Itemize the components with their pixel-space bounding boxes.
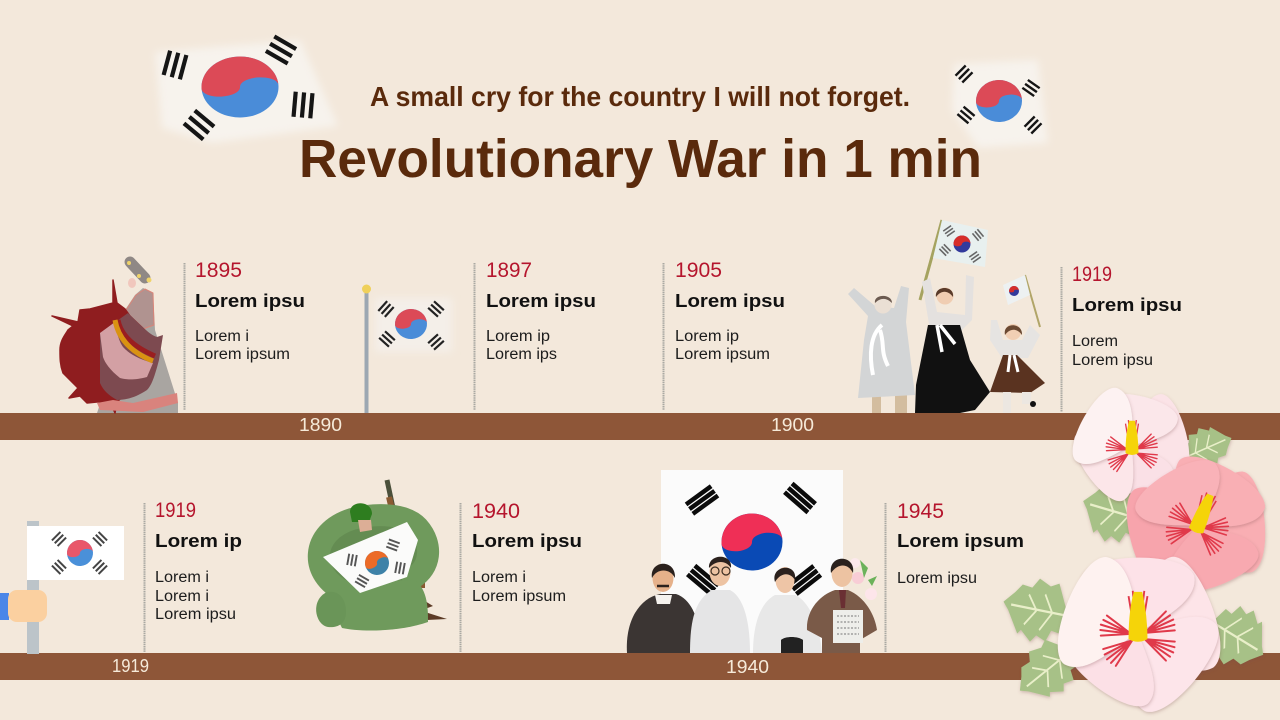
entry: 1895: Lorem ipsum: [195, 346, 290, 363]
icon: hand holding flag: [0, 521, 124, 654]
entry: 1945: Lorem ipsum: [897, 531, 1024, 551]
entry: 1897: Lorem ips: [486, 346, 557, 363]
entry: 1895: 1895: [195, 259, 242, 282]
flower: deep pink, right: [1118, 445, 1273, 602]
entry: 1895: Lorem i: [195, 328, 249, 345]
icon: flag on pole: [362, 284, 452, 413]
entry: 1940: Lorem ipsum: [472, 588, 566, 605]
entry: 1905: Lorem ip: [675, 328, 739, 345]
flower: pale pink, bottom: [1046, 550, 1232, 720]
illustration: three people cheering with flags: [848, 220, 1045, 413]
entry: 1940: [460, 500, 582, 652]
entry: 1895: Lorem ipsu: [195, 291, 305, 311]
entry: 1905: 1905: [675, 259, 722, 282]
entry: 1940: Lorem ipsu: [472, 531, 582, 551]
entry: 1919 upper: Lorem ipsu: [1072, 352, 1153, 369]
entry: 1919 lower: Lorem ip: [155, 531, 242, 551]
entry: 1919 lower: Lorem i: [155, 588, 209, 605]
entry: 1945: [886, 500, 1024, 652]
entry: 1905: Lorem ipsu: [675, 291, 785, 311]
leaves: [997, 417, 1280, 713]
title: Revolutionary War in 1 min: [299, 129, 982, 189]
flower: pale pink, top: [1063, 381, 1196, 509]
axis label: 1900: 1900: [771, 415, 814, 435]
entry: 1945: Lorem ipsu: [897, 570, 977, 587]
timeline bar: upper: [0, 413, 1280, 440]
timeline bar: lower: [0, 653, 1280, 680]
illustration: soldier hugging flag: [314, 480, 447, 630]
entry: 1919 upper: 1919: [1072, 263, 1112, 286]
entry: 1940: Lorem i: [472, 569, 526, 586]
axis label: 1919: 1919: [112, 656, 149, 676]
entry: 1897: 1897: [486, 259, 532, 282]
entry: 1895: [184, 259, 305, 410]
entry: 1919 lower: 1919: [155, 499, 196, 522]
illustration: flag with four independence figures: [627, 470, 877, 653]
entry: 1897: [474, 259, 596, 410]
decoration: hibiscus flowers and leaves: [997, 381, 1280, 720]
subtitle: A small cry for the country I will not forget.: [370, 81, 910, 112]
entry: 1919 upper: [1062, 263, 1182, 412]
entry: 1897: Lorem ip: [486, 328, 550, 345]
entry: 1945: 1945: [897, 500, 944, 523]
entry: 1940: 1940: [472, 500, 520, 523]
entry: 1905: [664, 259, 785, 410]
illustration: woman with red splash: [52, 261, 178, 413]
entry: 1919 upper: Lorem: [1072, 333, 1118, 350]
entry: 1919 lower: Lorem ipsu: [155, 606, 236, 623]
axis label: 1940: 1940: [726, 657, 769, 677]
entry: 1919 lower: [144, 499, 242, 652]
icon: large waving flag, top left: [155, 35, 338, 143]
axis label: 1890: 1890: [299, 415, 342, 435]
entry: 1919 upper: Lorem ipsu: [1072, 295, 1182, 315]
entry: 1919 lower: Lorem i: [155, 569, 209, 586]
entry: 1897: Lorem ipsu: [486, 291, 596, 311]
entry: 1905: Lorem ipsum: [675, 346, 770, 363]
icon: small waving flag, top right: [952, 60, 1048, 148]
